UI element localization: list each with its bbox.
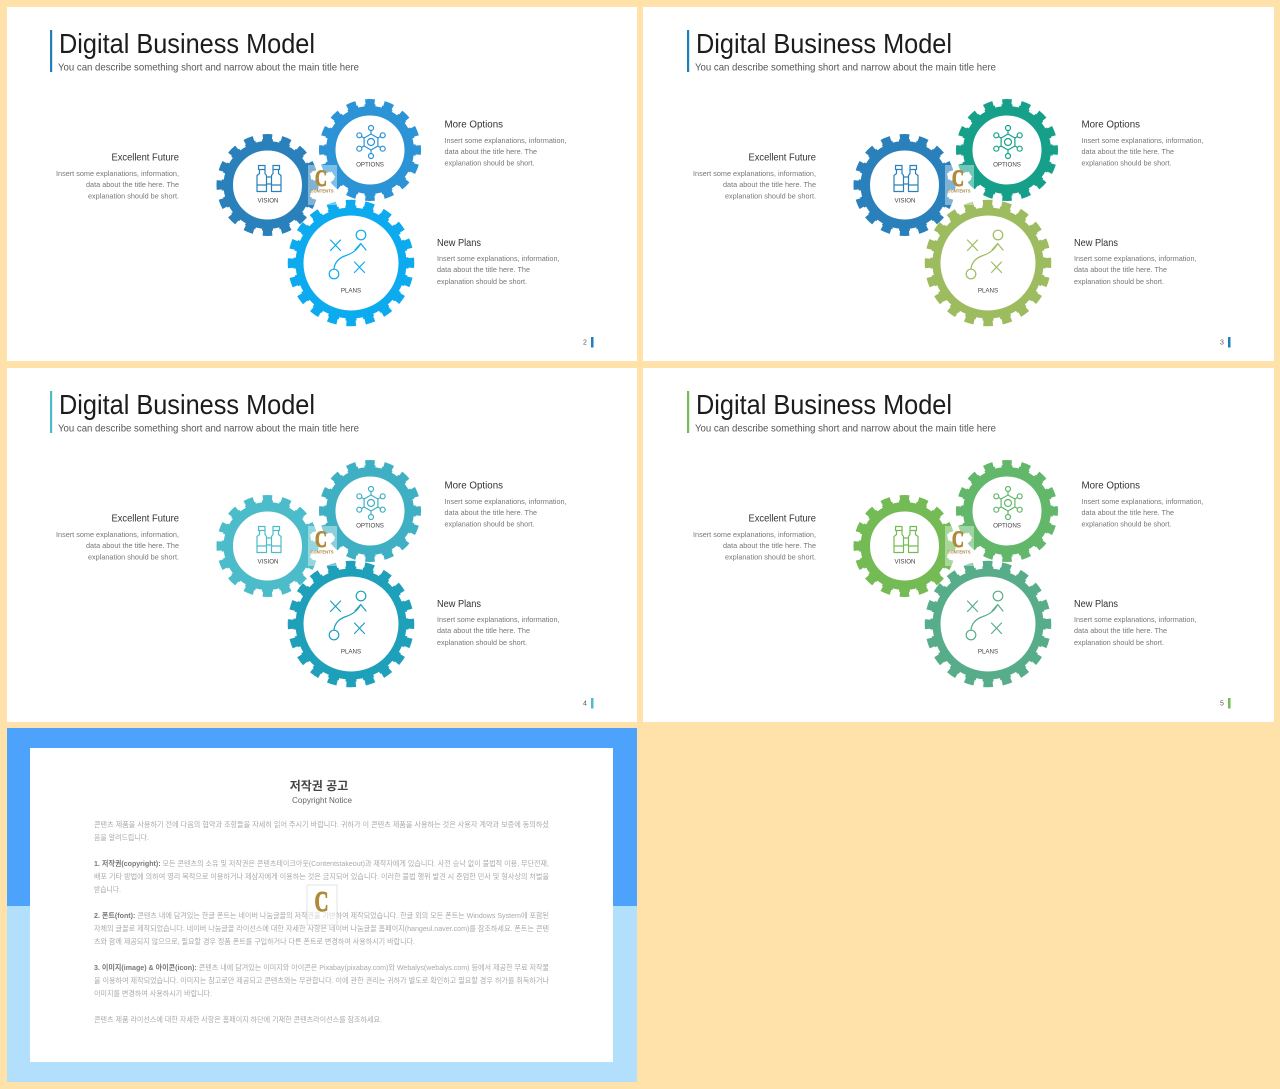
paragraph 1: 받습니다. (94, 885, 121, 894)
panel: slide 4 teal (7, 368, 637, 722)
text block: excellent future: Excellent Future (748, 514, 816, 524)
gear: plans (930, 204, 1046, 322)
gear: plans: PLANS (341, 288, 361, 294)
gear: plans: PLANS (978, 648, 998, 656)
notice subheading: Copyright Notice (292, 795, 352, 805)
title accent bar (687, 391, 689, 433)
text block: new plans: Insert some explanations, information, (1074, 254, 1196, 263)
page number (583, 337, 594, 348)
text block: new plans: explanation should be short. (1074, 277, 1164, 286)
text block: new plans: New Plans (437, 238, 481, 249)
text block: new plans (1074, 238, 1196, 286)
text block: new plans: explanation should be short. (1074, 638, 1164, 647)
watermark logo: C (314, 887, 328, 918)
text block: more options: data about the title here. The (444, 508, 537, 517)
gear: plans: PLANS (978, 288, 998, 294)
paragraph 1 (94, 859, 549, 894)
panel: slide 5 green (643, 368, 1274, 722)
title: Digital Business Model (696, 389, 952, 420)
title: Digital Business Model (59, 389, 315, 420)
text block: new plans: New Plans (437, 599, 481, 610)
text block: more options: More Options (444, 480, 503, 492)
watermark logo: CONTENTS (947, 550, 971, 554)
text block: excellent future: Excellent Future (112, 152, 179, 164)
gear: vision: VISION (258, 198, 278, 204)
gear: vision: VISION (258, 558, 278, 566)
text block: more options: data about the title here. The (444, 147, 537, 156)
text block: excellent future: Excellent Future (112, 514, 179, 524)
text block: new plans: New Plans (1074, 238, 1118, 249)
gear: options: OPTIONS (993, 522, 1021, 530)
closing paragraph: 콘텐츠 제품 라이선스에 대한 자세한 사항은 홈페이지 하단에 기재한 콘텐츠라이선스를 참조하세요. (94, 1015, 382, 1024)
page number: 2 (583, 340, 587, 346)
page number: 5 (1220, 700, 1224, 708)
text block: excellent future: Insert some explanations, information, (693, 169, 816, 178)
watermark logo (945, 526, 974, 566)
text block: more options: data about the title here. The (1082, 508, 1174, 517)
text block: more options: Insert some explanations, information, (1082, 136, 1204, 145)
intro paragraph: 음을 알려드립니다. (94, 833, 149, 842)
text block: more options (444, 120, 566, 168)
text block: excellent future: explanation should be short. (725, 552, 816, 562)
text block: excellent future: Insert some explanations, information, (56, 530, 179, 539)
gear: vision: VISION (895, 198, 915, 204)
text block: more options: More Options (1082, 120, 1140, 130)
text block: new plans: Insert some explanations, information, (1074, 615, 1196, 624)
subtitle: You can describe something short and narrow about the main title here (58, 62, 359, 74)
paragraph 1: 배포 기타 방법에 의하여 영리 목적으로 이용하거나 제삼자에게 이용하는 것은 금지되어 있습니다. 이러한 불법 행위 발견 시 준엄한 민사 및 형사상의 처벌을 (94, 872, 549, 881)
text block: more options (444, 480, 566, 528)
gear: options (960, 464, 1054, 558)
text block: excellent future (693, 152, 816, 200)
panel: slide 3 multicolor (643, 7, 1274, 361)
page number (1220, 337, 1230, 348)
gear: plans (930, 566, 1046, 682)
watermark logo: C (315, 527, 327, 552)
text block: new plans (1074, 599, 1196, 647)
gear: options (960, 104, 1054, 196)
text block: more options (1082, 120, 1204, 168)
paragraph 2 (94, 911, 549, 946)
gear: options: OPTIONS (356, 522, 384, 530)
watermark logo: CONTENTS (310, 550, 334, 554)
title accent bar (50, 30, 52, 72)
text block: new plans: explanation should be short. (437, 277, 527, 286)
text block: more options: More Options (1082, 480, 1140, 492)
page number (583, 698, 594, 708)
gear: options: OPTIONS (993, 162, 1021, 168)
panel: slide 2 blue (7, 7, 637, 361)
text block: excellent future: explanation should be short. (88, 552, 179, 562)
subtitle: You can describe something short and narrow about the main title here (695, 422, 996, 434)
watermark logo: CONTENTS (310, 188, 334, 194)
text block: excellent future: explanation should be short. (88, 192, 179, 200)
text block: new plans (437, 599, 560, 647)
gear: options: OPTIONS (356, 162, 384, 168)
notice heading: 저작권 공고 (290, 778, 348, 793)
page number (1220, 698, 1230, 708)
text block: excellent future (56, 514, 179, 562)
watermark logo (308, 526, 337, 566)
text block: more options: Insert some explanations, information, (1082, 497, 1204, 506)
text block: new plans (437, 238, 560, 286)
paragraph 1: 1. 저작권(copyright): 모든 콘텐츠의 소유 및 저작권은 콘텐츠테이크아웃(Contentstakeout)과 제작자에게 있습니다. 사전 승낙 없이 불법적 이용, 무단전재, (94, 859, 549, 868)
intro paragraph (94, 820, 549, 842)
text block: new plans: Insert some explanations, information, (437, 254, 560, 263)
text block: excellent future: Excellent Future (748, 152, 816, 164)
paragraph 2: 2. 폰트(font): 콘텐츠 내에 담겨있는 한글 폰트는 네이버 나눔글꼴의 저작권을 기반하여 제작되었습니다. 한글 외의 모든 폰트는 Windows System에 포함된 (94, 911, 549, 920)
paragraph 3: 을 이용하여 제작되었습니다. 이미지는 참고로만 제공되고 콘텐츠와는 무관합니다. 이에 관한 권리는 귀하가 별도로 확인하고 필요할 경우 허가를 취득하거나 (94, 976, 549, 985)
gear: options (324, 104, 416, 196)
text block: more options: Insert some explanations, information, (444, 136, 566, 145)
text block: more options (1082, 480, 1204, 528)
text block: more options: explanation should be short. (1082, 520, 1172, 528)
text block: excellent future: explanation should be short. (725, 192, 816, 200)
watermark logo: C (952, 166, 964, 191)
text block: new plans: data about the title here. The (1074, 265, 1167, 274)
page number: 3 (1220, 340, 1224, 346)
watermark logo: CONTENTS (947, 188, 971, 194)
title: Digital Business Model (696, 28, 952, 59)
text block: new plans: data about the title here. The (1074, 626, 1167, 635)
text block: more options: More Options (444, 120, 503, 130)
text block: excellent future (56, 152, 179, 200)
panel: copyright notice (7, 728, 637, 1082)
title: Digital Business Model (59, 28, 315, 59)
subtitle: You can describe something short and narrow about the main title here (58, 422, 359, 434)
text block: new plans: Insert some explanations, information, (437, 615, 560, 624)
paragraph 3: 3. 이미지(image) & 아이콘(icon): 콘텐츠 내에 담겨있는 이미지와 아이콘은 Pixabay(pixabay.com)와 Webalys(webalys.com) 등에서 제공한 무료 저작물 (94, 963, 549, 972)
intro paragraph: 콘텐츠 제품을 사용하기 전에 다음의 협약과 조항들을 자세히 읽어 주시기 바랍니다. 귀하가 이 콘텐츠 제품을 사용하는 것은 사용자 계약과 보증에 동의하셨 (94, 820, 549, 829)
gear: plans: PLANS (341, 648, 361, 656)
watermark logo: C (952, 527, 964, 552)
text block: more options: explanation should be short. (444, 158, 534, 168)
gear: vision (858, 138, 951, 232)
gear: vision: VISION (895, 558, 915, 566)
gear: vision (221, 138, 314, 232)
gear: plans (292, 204, 410, 322)
text block: excellent future: Insert some explanations, information, (693, 530, 816, 539)
text block: new plans: data about the title here. The (437, 626, 530, 635)
gear: options (324, 464, 416, 558)
text block: excellent future (693, 514, 816, 562)
paragraph 3 (94, 963, 549, 998)
gear: vision (858, 500, 951, 592)
watermark logo (308, 165, 337, 205)
watermark logo (307, 885, 337, 925)
text block: excellent future: data about the title here. The (86, 541, 179, 550)
text block: more options: Insert some explanations, information, (444, 497, 566, 506)
gear: vision (221, 500, 314, 592)
text block: more options: data about the title here. The (1082, 147, 1174, 156)
text block: excellent future: data about the title here. The (723, 180, 816, 189)
text block: excellent future: Insert some explanations, information, (56, 169, 179, 178)
page number: 4 (583, 700, 587, 708)
paragraph 2: 자체의 글꼴로 제작되었습니다. 네이버 나눔글꼴 라이선스에 대한 자세한 사항은 네이버 나눔글꼴 홈페이지(hangeul.naver.com)를 참조하세요. 폰트는 콘텐 (94, 924, 549, 933)
text block: excellent future: data about the title here. The (86, 180, 179, 189)
watermark logo: C (315, 166, 327, 191)
text block: new plans: explanation should be short. (437, 638, 527, 647)
watermark logo (945, 165, 974, 205)
text block: more options: explanation should be short. (444, 520, 534, 528)
text block: new plans: data about the title here. The (437, 265, 530, 274)
gear: plans (292, 566, 410, 682)
subtitle: You can describe something short and narrow about the main title here (695, 62, 996, 74)
title accent bar (50, 391, 52, 433)
text block: new plans: New Plans (1074, 599, 1118, 610)
title accent bar (687, 30, 689, 72)
paragraph 2: 츠와 함께 제공되지 않으므로, 필요할 경우 정품 폰트를 구입하거나 다른 폰트로 변경하여 사용하시기 바랍니다. (94, 937, 415, 946)
paragraph 3: 이미지를 변경하여 사용하시기 바랍니다. (94, 989, 212, 998)
text block: excellent future: data about the title here. The (723, 541, 816, 550)
text block: more options: explanation should be short. (1082, 158, 1172, 168)
